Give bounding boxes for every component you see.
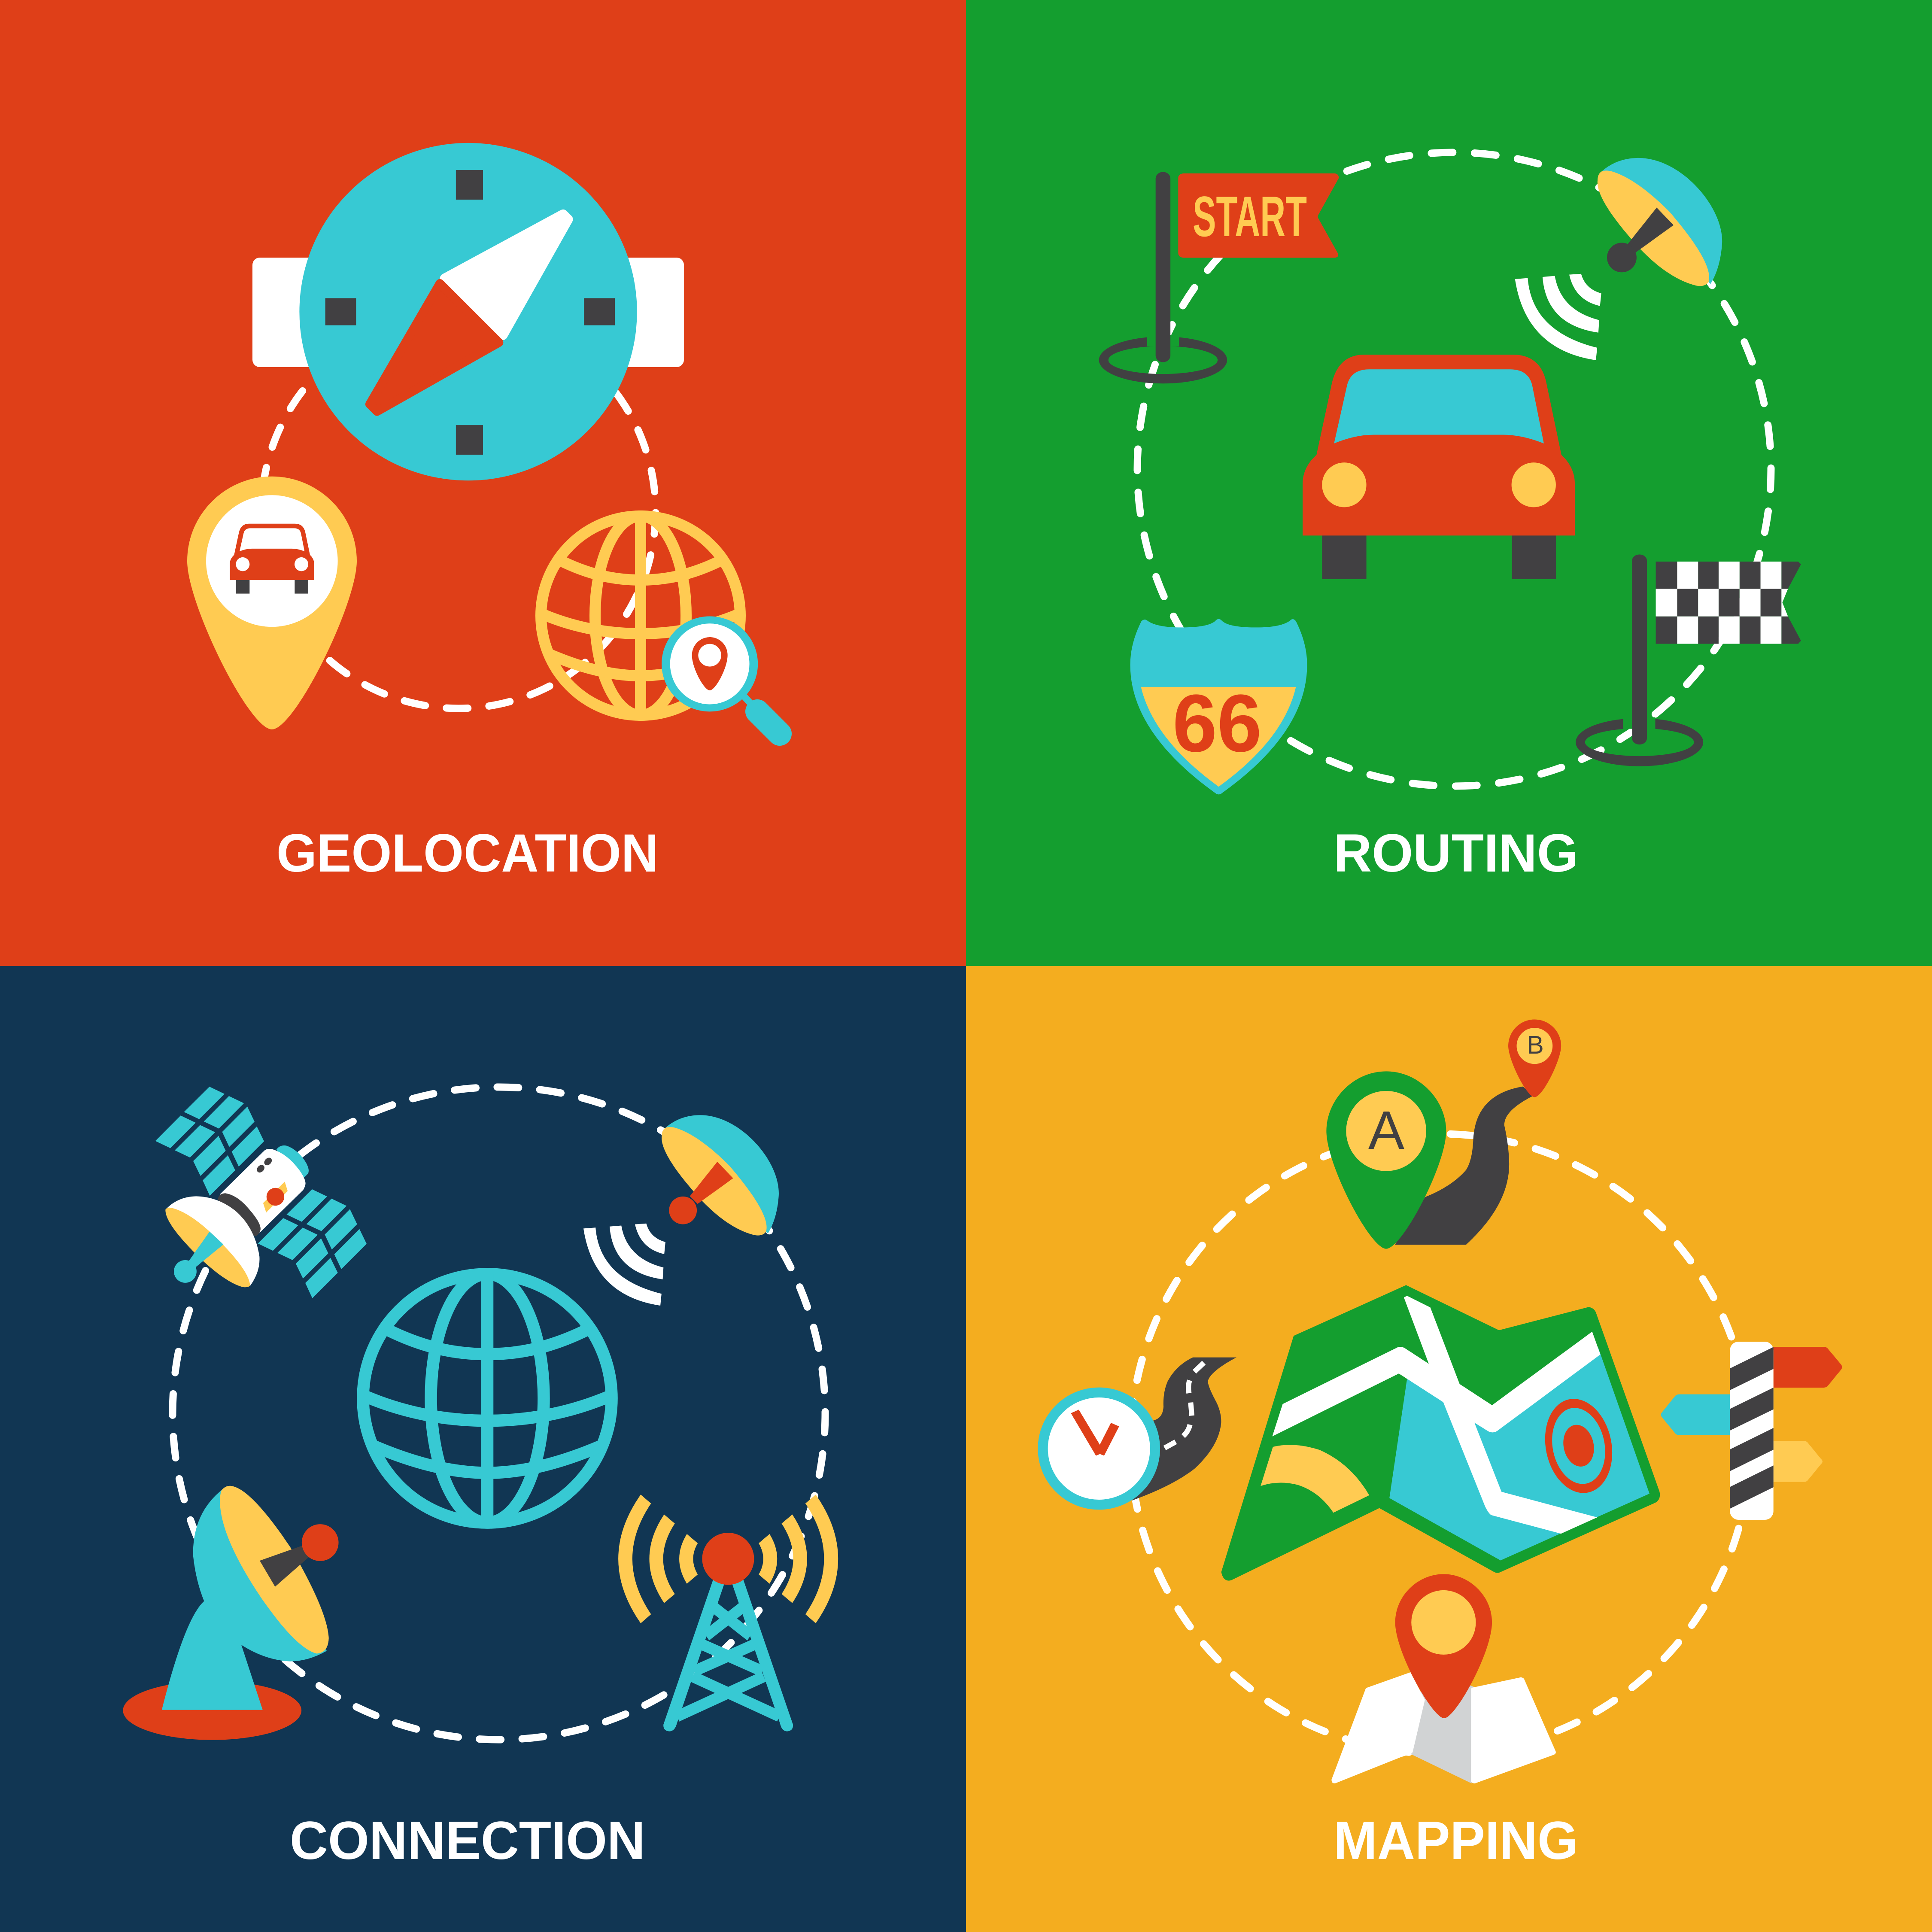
icon: folded map	[1221, 1285, 1660, 1581]
icon: magnifier with pin	[666, 620, 780, 734]
panel: routing	[966, 0, 1932, 966]
icon: road with dashes	[1132, 1358, 1236, 1501]
heading: mapping: MAPPING	[1334, 1811, 1578, 1871]
dashed route circle	[1130, 1134, 1750, 1754]
heading: geolocation: GEOLOCATION	[276, 823, 659, 883]
icon: signal waves	[1515, 274, 1601, 360]
icon: satellite dish	[1598, 158, 1722, 286]
icon: location pin with car	[187, 477, 357, 729]
label: B: B	[1527, 1031, 1544, 1059]
panel: connection	[0, 966, 966, 1932]
heading: routing: ROUTING	[1334, 823, 1578, 883]
icon: clock	[1043, 1392, 1155, 1505]
icon: start flag	[1099, 172, 1339, 383]
label: start: START	[1193, 185, 1307, 249]
icon: winding road to B	[1395, 1087, 1533, 1245]
dashed route circle	[1137, 152, 1771, 786]
icon: signal waves	[583, 1224, 665, 1306]
icon: finish flag	[1576, 554, 1801, 766]
icon: globe	[541, 516, 740, 715]
dashed route circle	[261, 314, 656, 708]
icon: signpost	[1661, 1342, 1842, 1520]
icon: paper map with pin	[1331, 1574, 1556, 1783]
icon: pin B	[1508, 1019, 1561, 1097]
icon: dish	[662, 1115, 779, 1236]
icon: watch band	[252, 258, 684, 367]
panel: mapping	[966, 966, 1932, 1932]
icon: compass	[299, 143, 637, 480]
icon: highway shield	[1130, 619, 1307, 794]
panel: geolocation	[0, 0, 966, 966]
icon: pin A	[1326, 1071, 1446, 1249]
icon: satellite	[155, 1087, 367, 1298]
label: route 66: 66	[1173, 678, 1262, 769]
label: A: A	[1368, 1100, 1404, 1160]
dashed route circle	[173, 1087, 825, 1740]
icon: globe	[363, 1274, 612, 1523]
icon: car	[1303, 355, 1575, 579]
heading: connection: CONNECTION	[290, 1811, 645, 1871]
icon: ground satellite dish	[123, 1486, 339, 1740]
icon: radio tower	[618, 1495, 838, 1732]
